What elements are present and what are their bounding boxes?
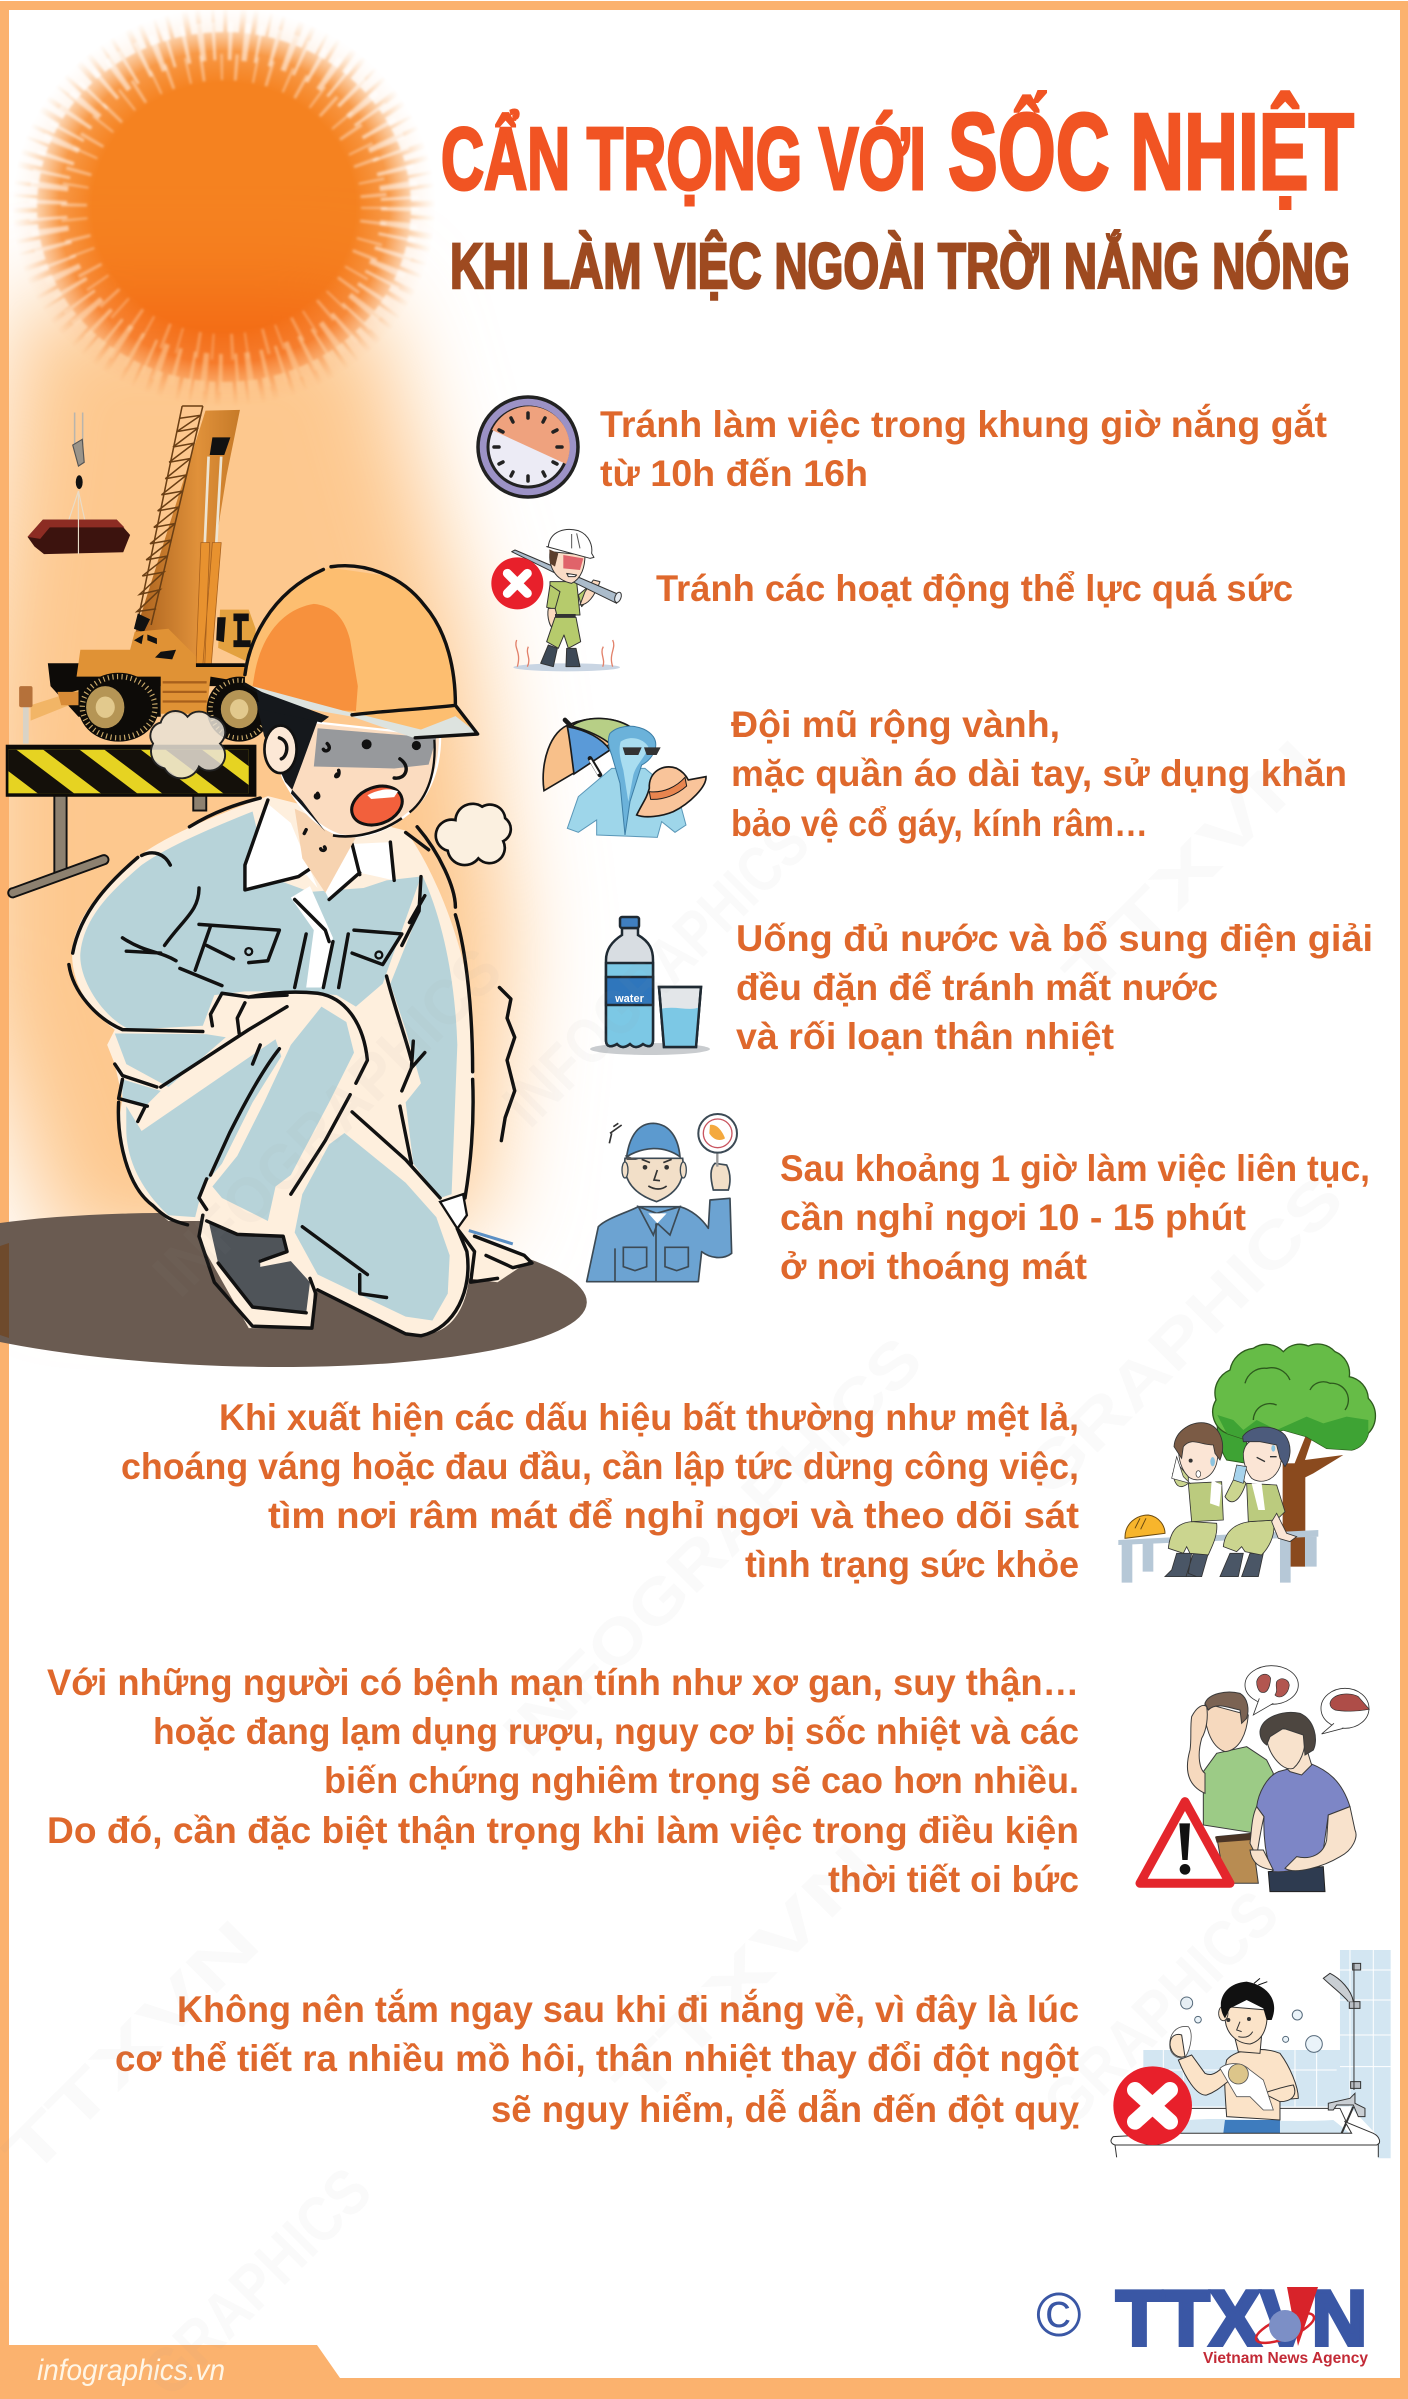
watermarks: TTXVN	[1049, 726, 1333, 1010]
tip 1 text: từ 10h đến 16h	[600, 453, 868, 494]
warning 2: sick men with warning sign	[1140, 1666, 1369, 1892]
watermarks: INFOGRAPHICS	[489, 1323, 936, 1770]
tip 1: clock icon	[478, 397, 578, 497]
tip 1 text: Tránh làm việc trong khung giờ nắng gắt	[600, 403, 1327, 445]
warning 2 text: thời tiết oi bức	[828, 1859, 1079, 1900]
warning 1 text: tình trạng sức khỏe	[745, 1544, 1079, 1585]
puff of breath left	[150, 711, 225, 778]
tip 4: water bottle and glass icon: water	[614, 993, 645, 1005]
tip 5 text: Sau khoảng 1 giờ làm việc liên tục,	[780, 1148, 1370, 1189]
warning 3: man bathing icon	[1111, 1950, 1391, 2158]
warning 2 text: Với những người có bệnh mạn tính như xơ gan, suy thận…	[47, 1662, 1079, 1703]
tip 4 text: Uống đủ nước và bổ sung điện giải	[736, 918, 1373, 959]
agency logo TTXVN: TTXVN	[1116, 2274, 1367, 2362]
title line 1: CẨN TRỌNG VỚI	[441, 109, 926, 208]
tip 5 text	[780, 1148, 1370, 1287]
agency logo TTXVN: Vietnam News Agency	[1203, 2350, 1368, 2367]
tip 4 text	[736, 918, 1373, 1057]
warning 3 text: Không nên tắm ngay sau khi đi nắng về, vì đây là lúc	[177, 1988, 1079, 2030]
warning 3 text: cơ thể tiết ra nhiều mồ hôi, thân nhiệt thay đổi đột ngột	[115, 2038, 1079, 2079]
tip 2: overloaded worker icon	[491, 529, 623, 671]
tip 5 text: cần nghỉ ngơi 10 - 15 phút	[780, 1197, 1246, 1238]
warning 1: workers resting under tree	[1118, 1344, 1375, 1583]
watermarks: TTXVN	[599, 1829, 890, 2120]
tip 3 text: mặc quần áo dài tay, sử dụng khăn	[731, 753, 1347, 794]
watermarks: INFOGRAPHICS	[489, 806, 823, 1140]
illustration: crane, load and barrier	[6, 405, 263, 898]
tip 4: water bottle and glass icon	[590, 917, 710, 1055]
tip 3: sun protection icon	[543, 718, 706, 837]
glass	[659, 987, 701, 1047]
warning 3 text: sẽ nguy hiểm, dễ dẫn đến đột quỵ	[491, 2089, 1079, 2130]
watermarks: INFOGRAPHICS	[139, 934, 515, 1310]
puff of breath right	[436, 804, 511, 865]
warning 2 text: hoặc đang lạm dụng rượu, nguy cơ bị sốc nhiệt và các	[153, 1711, 1079, 1752]
illustration: exhausted worker kneeling	[0, 566, 589, 1379]
worker body	[69, 796, 532, 1336]
warning 1 text	[121, 1397, 1079, 1585]
tip 5: man with rest sign icon	[587, 1114, 737, 1282]
tip 3 text: bảo vệ cổ gáy, kính râm…	[731, 803, 1148, 844]
ground shadow	[0, 1201, 589, 1379]
tip 3 text	[731, 704, 1347, 844]
worker head and helmet	[245, 566, 478, 893]
watermarks: GRAPHICS	[1009, 1162, 1357, 1510]
warning 2 text: Do đó, cần đặc biệt thận trọng khi làm việc trong điều kiện	[47, 1810, 1079, 1851]
warning 1 text: tìm nơi râm mát để nghỉ ngơi và theo dõi sát	[268, 1495, 1079, 1536]
tip 4 text: và rối loạn thân nhiệt	[736, 1016, 1114, 1057]
tip 4 text: đều đặn để tránh mất nước	[736, 967, 1218, 1008]
tip 3 text: Đội mũ rộng vành,	[731, 704, 1060, 745]
website footer label: infographics.vn	[37, 2354, 225, 2387]
warning 3 text	[115, 1988, 1079, 2130]
watermarks	[0, 726, 1357, 2399]
tip 2 text: Tránh các hoạt động thể lực quá sức	[656, 568, 1293, 609]
tip 1 text	[600, 403, 1327, 494]
tip 5 text: ở nơi thoáng mát	[780, 1246, 1087, 1287]
warning 2 text: biến chứng nghiêm trọng sẽ cao hơn nhiều.	[324, 1760, 1079, 1801]
title line 1	[441, 91, 1354, 213]
bottle	[606, 917, 653, 1047]
heat glow behind worker	[0, 300, 510, 1260]
copyright mark: ©	[1036, 2281, 1082, 2350]
sun	[12, 7, 436, 407]
warning 1 text: choáng váng hoặc đau đầu, cần lập tức dừng công việc,	[121, 1446, 1079, 1487]
warning 1 text: Khi xuất hiện các dấu hiệu bất thường như mệt lả,	[219, 1397, 1079, 1438]
warning 2 text	[47, 1662, 1079, 1900]
watermarks: GRAPHICS	[1029, 1877, 1292, 2140]
